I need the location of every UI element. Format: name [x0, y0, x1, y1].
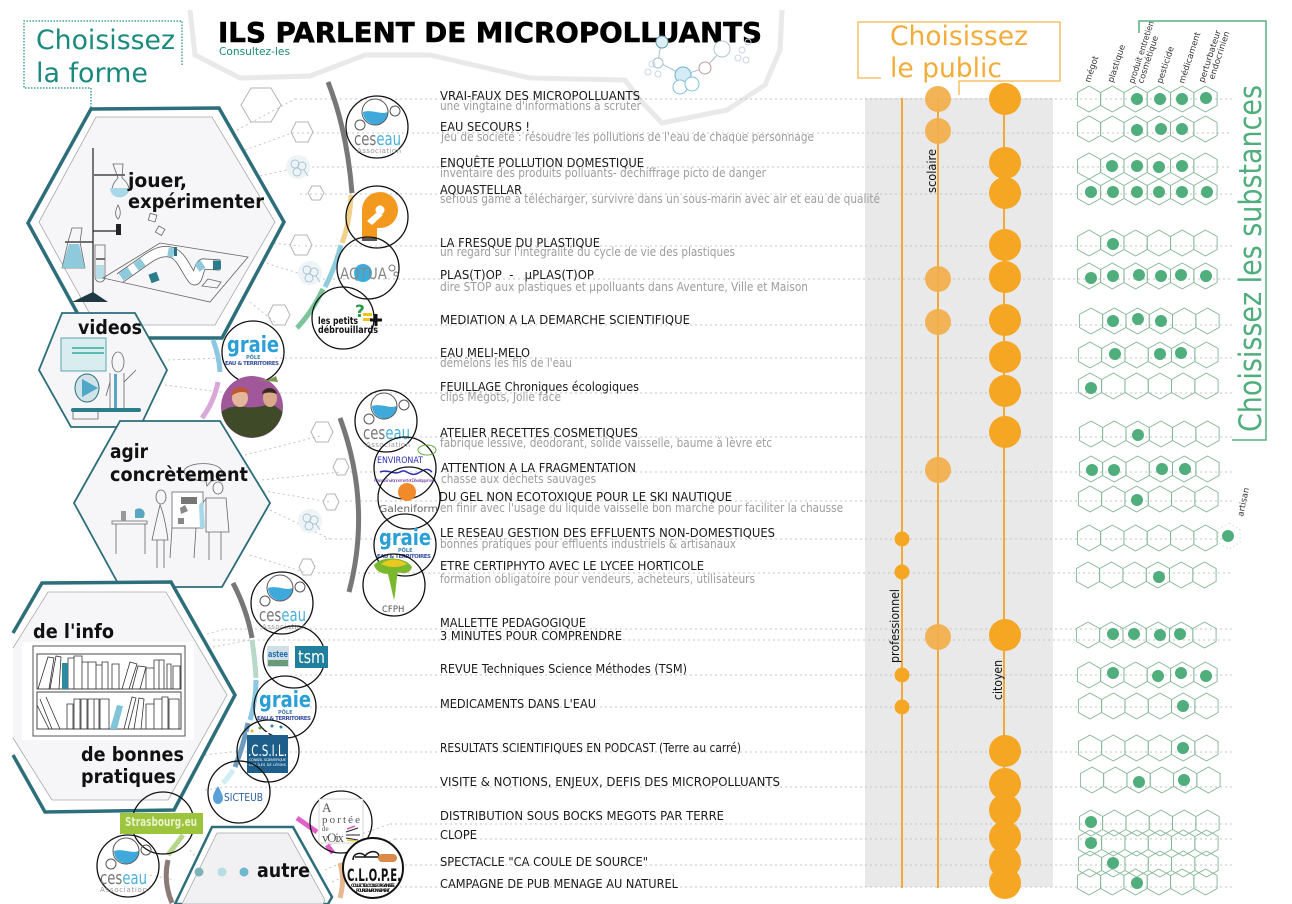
- substance column labels: produit entretien: [1127, 20, 1157, 85]
- substance column labels: plastique: [1106, 44, 1128, 84]
- logo: aqua: [337, 237, 399, 299]
- logo: ceseau 3: Association: [262, 623, 306, 631]
- list of resources: MEDIATION A LA DEMARCHE SCIENTIFIQUE: [440, 312, 690, 327]
- logo: CSIL: .C.S.I.L.: [248, 741, 287, 760]
- logo: SICTEUB: SICTEUB: [224, 791, 263, 804]
- logo: graie 1: [222, 321, 284, 383]
- logo: Strasbourg: Strasbourg.eu: [125, 815, 197, 829]
- list of resources: ENQUÊTE POLLUTION DOMESTIQUE: [440, 155, 644, 170]
- list of resources: EAU SECOURS !: [440, 119, 530, 134]
- logo: CSIL: DES ÎLES DE LÉRINS: [249, 762, 287, 767]
- logo: P: [346, 186, 408, 248]
- panel: choisissez les substances: Choisissez les substances: [1233, 85, 1269, 432]
- panel: choisissez les substances: [1139, 21, 1269, 440]
- panel: choisissez la forme: la forme: [36, 58, 148, 89]
- panel: choisissez la forme: Choisissez: [36, 25, 175, 56]
- logo: graie 1: EAU & TERRITOIRES: [225, 361, 279, 367]
- list of resources: DU GEL NON ECOTOXIQUE POUR LE SKI NAUTIQUE: [439, 489, 732, 504]
- list of resources: DISTRIBUTION SOUS BOCKS MEGOTS PAR TERRE: [440, 808, 724, 823]
- list of resources: VRAI-FAUX DES MICROPOLLUANTS: [440, 88, 640, 103]
- substance column labels: [1082, 20, 1252, 518]
- label: videos: videos: [78, 316, 142, 339]
- list of resources: ATTENTION A LA FRAGMENTATION: [441, 460, 636, 475]
- logo: les petits débrouillards: ?: [355, 302, 365, 322]
- illustration: people at a flip chart: [112, 464, 229, 568]
- logo: C.L.O.P.E.: [343, 838, 403, 898]
- list of resources: dire STOP aux plastiques et µpolluants dans Aventure, Ville et Maison: [440, 280, 808, 294]
- panel: autre: [175, 827, 332, 904]
- logo: graie 2: graie: [379, 526, 431, 551]
- arcs: organisations groups: [166, 82, 359, 903]
- logo: ceseau 4: [97, 835, 159, 897]
- dots: citoyen: [989, 83, 1021, 899]
- logo: à portée de voix: de: [322, 825, 329, 833]
- logo: galeniform: Galeniform: [379, 504, 438, 515]
- label: jouer: jouer,: [127, 169, 187, 192]
- label: autre: autre: [257, 859, 310, 882]
- logo: CSIL: CONSEIL SCIENTIFIQUE: [249, 758, 286, 762]
- icon: molecule decoration: [645, 36, 751, 94]
- substance column labels: artisan: [1236, 487, 1252, 518]
- list of resources: CAMPAGNE DE PUB MENAGE AU NATUREL: [440, 876, 678, 891]
- logo: ceseau 4: Association: [100, 886, 147, 894]
- logo: à portée de voix: portée: [322, 814, 360, 826]
- logo: aqua: AQTUA: [340, 264, 387, 283]
- label: agir: agir: [110, 440, 148, 463]
- logo: graie 3: PÔLE: [278, 709, 293, 716]
- list of resources: chasse aux déchets sauvages: [441, 472, 596, 486]
- logo: les petits débrouillards: [312, 287, 382, 349]
- logo: ceseau 1: ceseau: [354, 129, 401, 150]
- grey title outline: [190, 10, 782, 123]
- logo: C.L.O.P.E.: POUR L'ENVIRONNEMENT: [356, 888, 390, 893]
- logo: graie 3: [254, 676, 316, 738]
- logo: ceseau 1: [346, 96, 408, 158]
- list of resources: inventaire des produits polluants- déchiffrage picto de danger: [440, 166, 766, 180]
- logo: astee tsm: [263, 626, 328, 688]
- panel: de l'info / de bonnes pratiques: [13, 582, 235, 812]
- subtitle: Consultez-les: [219, 45, 290, 58]
- list of resources: LA FRESQUE DU PLASTIQUE: [440, 235, 600, 250]
- list of resources: fabrique lessive, déodorant, solide vaisselle, baume à lèvre etc: [440, 436, 772, 450]
- list of resources: jeu de société : résoudre les pollutions de l'eau de chaque personnage: [440, 130, 814, 144]
- logo: graie 3: graie: [259, 688, 311, 713]
- label: professionnel: professionnel: [888, 589, 902, 663]
- logo: ceseau 2: Association: [366, 441, 410, 449]
- label: de bonnes: de bonnes: [81, 743, 184, 766]
- label: scolaire: scolaire: [925, 149, 939, 193]
- illustration: video screen and presenter: [61, 338, 141, 419]
- small hexagon and molecule markers: [241, 88, 349, 575]
- substance column labels: cosmétique: [1135, 34, 1161, 85]
- list of resources: SPECTACLE "CA COULE DE SOURCE": [440, 854, 648, 869]
- panel: choisissez le public: Choisissez: [890, 21, 1028, 52]
- chart: public lines and dots: [894, 83, 1021, 899]
- logo: graie 3: EAU & TERRITOIRES: [257, 716, 311, 722]
- substance column labels: perturbateur: [1197, 29, 1224, 84]
- list of resources: RESULTATS SCIENTIFIQUES EN PODCAST (Terre au carré): [440, 740, 741, 755]
- list of resources: PLAS(T)OP - µPLAS(T)OP: [440, 267, 594, 282]
- list of resources: MALLETTE PEDAGOGIQUE: [440, 615, 586, 630]
- logo: C.L.O.P.E.: C.L.O.P.E.: [347, 866, 401, 886]
- logo: les petits débrouillards: débrouillards: [318, 325, 378, 336]
- panel: jouer, expérimenter: [28, 108, 284, 338]
- substance column labels: endocrinien: [1207, 30, 1232, 81]
- list of resources: clips Mégots, Jolie face: [440, 390, 561, 404]
- logo: à portée de voix: vOix: [322, 830, 344, 845]
- list of resources: [439, 88, 880, 891]
- dots: professionnel: [894, 532, 910, 714]
- list of resources: EAU MELI-MELO: [440, 345, 530, 360]
- panel: choisissez le public: [858, 21, 1060, 95]
- list of resources: MEDICAMENTS DANS L'EAU: [440, 696, 596, 711]
- panel: agir concrètement: [74, 421, 270, 587]
- logo: galeniform: [378, 467, 440, 529]
- panel: choisissez le public: le public: [890, 53, 1002, 84]
- logo: environat: ENVIRONAT: [377, 456, 423, 466]
- logo: graie 2: [374, 514, 436, 576]
- label: pratiques: pratiques: [81, 765, 176, 788]
- dots: scolaire: [925, 86, 951, 650]
- chart: substances matrix: [1076, 86, 1240, 895]
- title: ILS PARLENT DE MICROPOLLUANTS: [218, 16, 762, 49]
- list of resources: REVUE Techniques Science Méthodes (TSM): [440, 661, 687, 676]
- logo: CFPH: CFPH: [382, 605, 404, 615]
- logo: CFPH: [363, 554, 425, 616]
- illustration: laboratory and board game: [62, 148, 248, 302]
- substance column labels: mégot: [1082, 54, 1102, 84]
- list of resources: ETRE CERTIPHYTO AVEC LE LYCEE HORTICOLE: [440, 558, 704, 573]
- substance column labels: pesticide: [1155, 45, 1177, 85]
- list of resources: CLOPE: [440, 827, 477, 842]
- logo: graie 2: PÔLE: [398, 547, 413, 554]
- list of resources: ATELIER RECETTES COSMETIQUES: [440, 425, 638, 440]
- logo: les petits débrouillards: les petits: [318, 316, 358, 327]
- logo: astee tsm: tsm: [298, 647, 325, 668]
- logo: ceseau 3: ceseau: [259, 605, 306, 626]
- logo: ceseau 4: ceseau: [100, 868, 147, 889]
- logo: ceseau 2: ceseau: [363, 423, 410, 444]
- list of resources: 3 MINUTES POUR COMPRENDRE: [440, 628, 622, 643]
- logo: Strasbourg: [120, 792, 203, 854]
- label: concrètement: concrètement: [110, 463, 248, 486]
- logo: CSIL: [237, 720, 299, 782]
- illustration: bookshelf: [22, 642, 194, 740]
- photo: two people: [221, 376, 283, 438]
- label: de l'info: de l'info: [33, 620, 114, 643]
- logo: à portée de voix: A: [322, 800, 332, 815]
- logo: environat: [374, 437, 436, 499]
- panel: videos: [39, 313, 167, 427]
- row guide lines: [150, 99, 1232, 887]
- logo: à portée de voix: [310, 791, 372, 853]
- panel: public band: [865, 98, 1053, 887]
- list of resources: VISITE & NOTIONS, ENJEUX, DEFIS DES MICROPOLLUANTS: [440, 774, 780, 789]
- logo: graie 1: graie: [227, 333, 279, 358]
- list of resources: LE RESEAU GESTION DES EFFLUENTS NON-DOMESTIQUES: [440, 525, 775, 540]
- panel: choisissez la forme: [24, 21, 182, 109]
- list of resources: démêlons les fils de l'eau: [440, 356, 572, 370]
- logo: environat: Réseau Environnement et Développement: [374, 478, 436, 483]
- list of resources: FEUILLAGE Chroniques écologiques: [440, 379, 639, 394]
- list of resources: formation obligatoire pour vendeurs, acheteurs, utilisateurs: [440, 572, 755, 586]
- list of resources: bonnes pratiques pour effluents industriels & artisanaux: [440, 537, 736, 551]
- logo: ceseau 3: [251, 572, 313, 634]
- logo: ceseau 2: [355, 390, 417, 452]
- list of resources: en finir avec l'usage du liquide vaisselle bon marché pour faciliter la chausse: [440, 501, 843, 515]
- substance column labels: médicament: [1176, 30, 1204, 85]
- list of resources: un regard sur l'intégralité du cycle de vie des plastiques: [440, 245, 735, 259]
- list of resources: serious game à télécharger, survivre dans un sous-marin avec air et eau de qualité: [440, 192, 880, 206]
- logo: SICTEUB: [208, 761, 270, 823]
- logo: astee tsm: astee: [268, 650, 288, 660]
- list of resources: une vingtaine d'informations à scruter: [440, 99, 641, 113]
- list of resources: AQUASTELLAR: [440, 182, 522, 197]
- logo: ceseau 1: Association: [357, 147, 401, 155]
- logo: C.L.O.P.E.: COLLECTE LOCALE ORGANISÉE: [351, 883, 395, 888]
- logo: graie 1: PÔLE: [246, 354, 261, 361]
- logo: graie 2: EAU & TERRITOIRES: [377, 554, 431, 560]
- label: expérimenter: expérimenter: [128, 190, 264, 213]
- label: citoyen: citoyen: [991, 660, 1005, 700]
